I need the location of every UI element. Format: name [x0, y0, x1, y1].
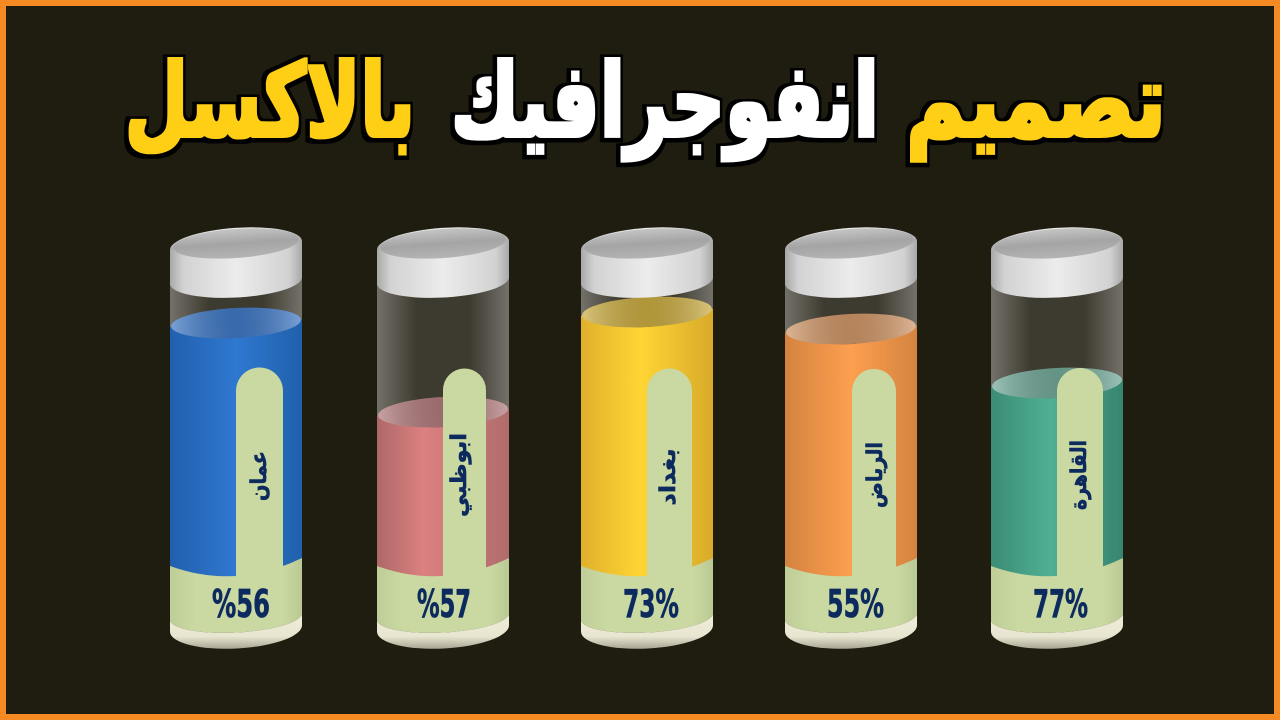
cap: [785, 225, 917, 298]
green base: [785, 550, 917, 633]
label text: بغداد: [656, 448, 681, 506]
title word: yellow right: تصميم: [906, 42, 1166, 161]
cap: [170, 225, 302, 298]
cream foot: [991, 613, 1123, 649]
label pill: [852, 369, 896, 577]
percent: %57: [417, 582, 471, 626]
green base: [377, 550, 509, 633]
label text: ابوظبي: [447, 433, 472, 517]
percent: 73%: [623, 582, 679, 626]
percent: %56: [212, 582, 270, 626]
cap: [991, 225, 1123, 298]
label pill: [443, 368, 486, 577]
label text: الرياض: [863, 442, 888, 508]
green base: [581, 550, 713, 633]
cylinder: Oman 56%: [170, 225, 302, 649]
label pill: [1057, 368, 1103, 577]
title word: yellow left: بالاكسل: [125, 42, 415, 160]
label pill: [236, 368, 283, 577]
glass tube: [785, 265, 917, 575]
label pill: [647, 369, 692, 577]
glass tube: [581, 265, 713, 575]
cap: [581, 225, 713, 298]
glass tube: [170, 265, 302, 575]
cylinder: Cairo 77%: [991, 225, 1123, 649]
cream foot: [377, 613, 509, 649]
cap: [377, 225, 509, 298]
label text: عمان: [247, 451, 272, 501]
cylinder: Abu Dhabi 57%: [377, 225, 509, 649]
cream foot: [170, 613, 302, 649]
liquid: [377, 394, 509, 576]
green base: [170, 550, 302, 633]
glass tube: [377, 265, 509, 575]
percent: 55%: [827, 582, 884, 626]
title word: white center: انفوجرافيك: [451, 42, 879, 161]
glass tube: [991, 265, 1123, 575]
cream foot: [581, 613, 713, 649]
cream foot: [785, 613, 917, 649]
title: [125, 42, 1166, 161]
percent: 77%: [1033, 582, 1088, 626]
liquid: [991, 365, 1123, 576]
liquid: [170, 305, 302, 576]
cylinder: Baghdad 73%: [581, 225, 713, 649]
liquid: [785, 311, 917, 576]
liquid: [581, 294, 713, 576]
label text: القاهرة: [1067, 440, 1092, 510]
green base: [991, 550, 1123, 633]
cylinder: Riyadh 55%: [785, 225, 917, 649]
